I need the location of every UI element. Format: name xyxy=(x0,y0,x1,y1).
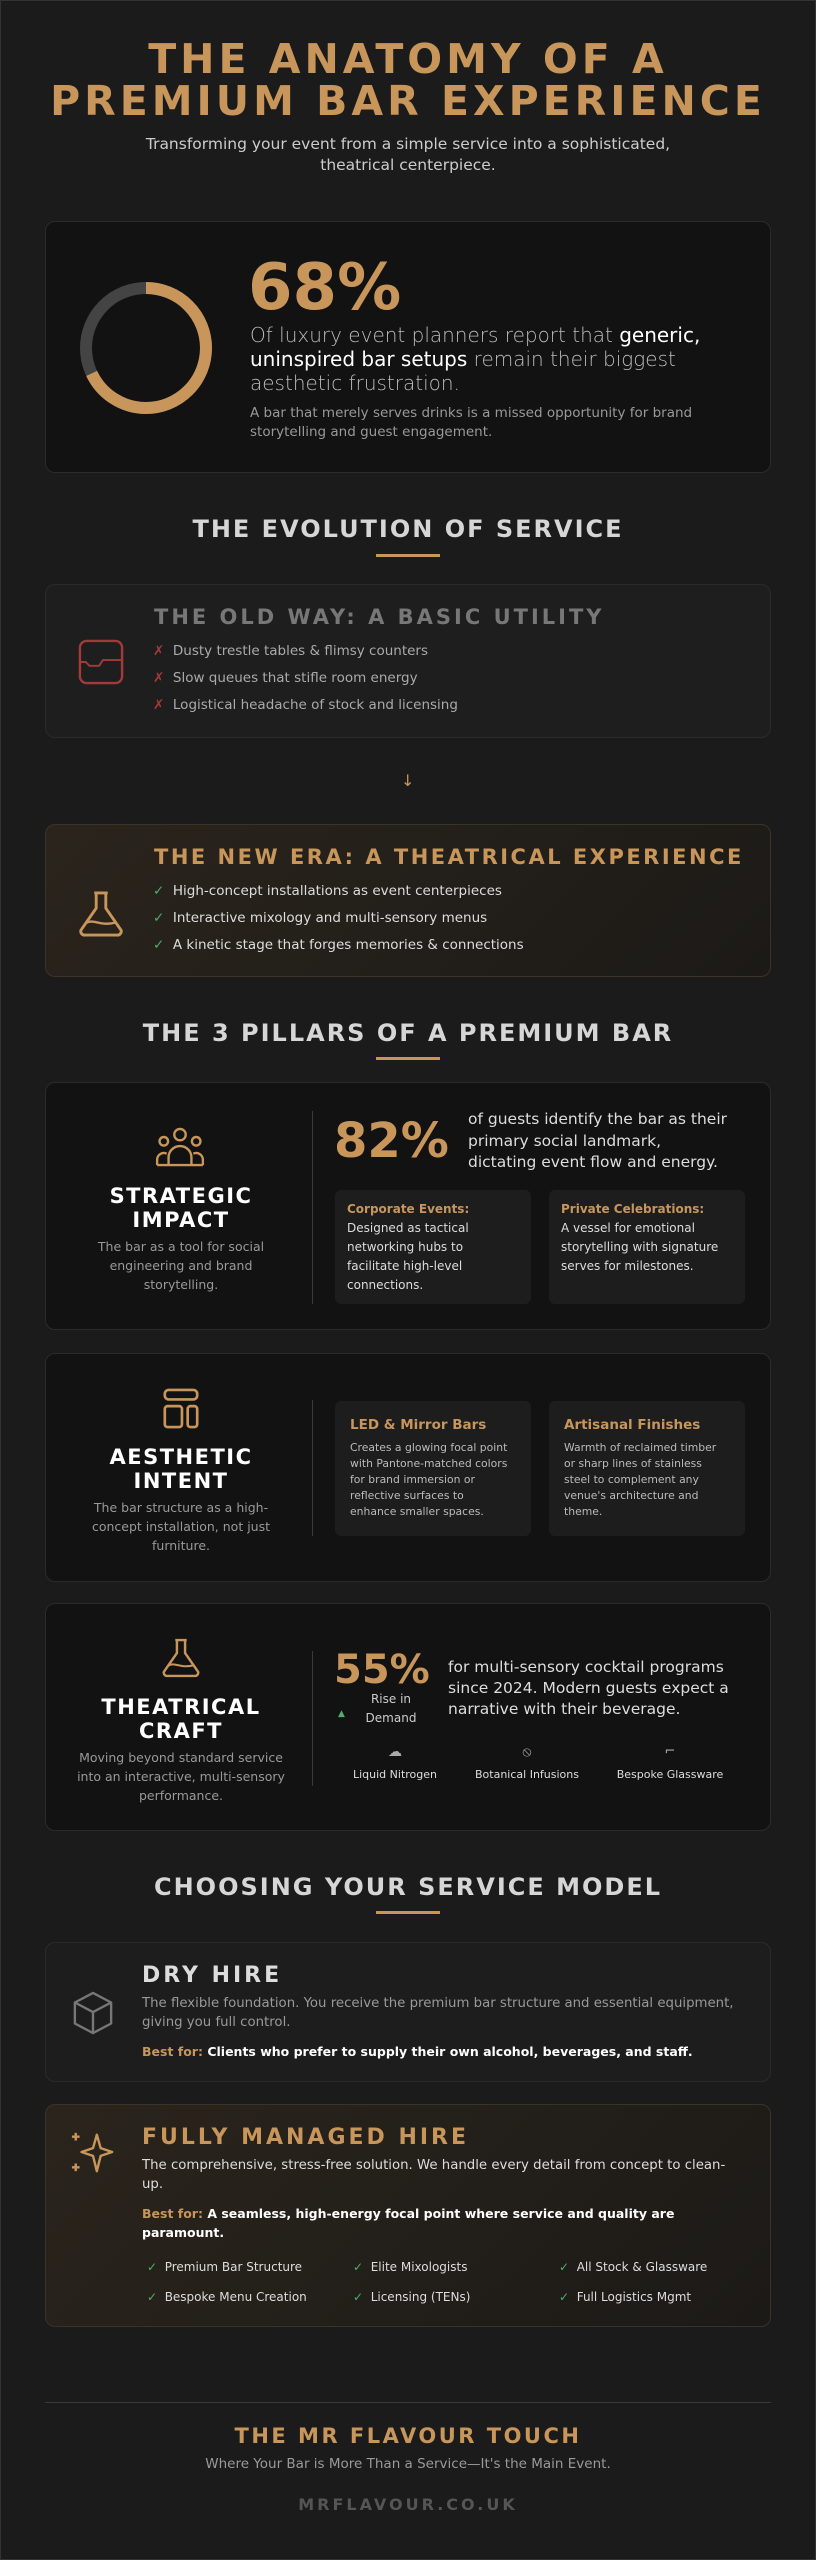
icon: cube xyxy=(74,1992,112,2034)
stat text: Of luxury event planners report that generic, uninspired bar setups remain their biggest aesthetic frustration. xyxy=(250,323,700,395)
sub-card: private: Private Celebrations: xyxy=(561,1202,704,1216)
sub-card: artisanal xyxy=(549,1401,745,1536)
stat 82%: 82% xyxy=(334,1113,449,1169)
icon: flask xyxy=(162,1638,200,1678)
panel: theatrical craft: for multi-sensory cocktail programs since 2024. Modern guests expect a narrative with their beverage. xyxy=(448,1658,729,1718)
panel: aesthetic intent xyxy=(45,1353,771,1582)
icon row: Botanical Infusions xyxy=(475,1768,579,1781)
list: ✗ Dusty trestle tables & flimsy counters xyxy=(153,643,428,659)
sub-card: corporate: connections. xyxy=(347,1278,423,1292)
icon row: ⌐ xyxy=(665,1744,675,1759)
title xyxy=(109,1445,253,1493)
sub-card: corporate xyxy=(335,1190,531,1304)
checklist: ✓ Full Logistics Mgmt xyxy=(559,2290,691,2304)
list: ✗ Slow queues that stifle room energy xyxy=(153,670,418,686)
description: The flexible foundation. You receive the premium bar structure and essential equipment, giving you full control. xyxy=(142,1996,734,2030)
sub-card: LED: with Pantone-matched colors xyxy=(350,1457,507,1470)
list xyxy=(153,643,458,713)
subtitle xyxy=(146,135,670,174)
icon: layout xyxy=(163,1388,199,1428)
checklist: ✓ Premium Bar Structure xyxy=(147,2260,302,2274)
list: ✗ Logistical headache of stock and licensing xyxy=(153,697,458,713)
panel: theatrical craft xyxy=(45,1603,771,1831)
title: THEATRICAL xyxy=(101,1695,261,1719)
title xyxy=(101,1695,261,1743)
donut chart xyxy=(80,282,212,414)
heading: pillars: THE 3 PILLARS OF A PREMIUM BAR xyxy=(143,1019,673,1047)
title: IMPACT xyxy=(132,1208,230,1232)
icon: broken screen xyxy=(78,640,124,684)
panel: theatrical craft: Rise in xyxy=(371,1692,411,1706)
icon row: ☁ xyxy=(388,1744,402,1760)
subtitle: Transforming your event from a simple service into a sophisticated, xyxy=(146,135,670,153)
title xyxy=(110,1184,252,1232)
checklist: ✓ Licensing (TENs) xyxy=(353,2290,470,2304)
panel: strategic impact: of guests identify the bar as their primary social landmark, xyxy=(468,1110,727,1150)
subtitle: theatrical centerpiece. xyxy=(320,156,496,174)
title: PREMIUM BAR EXPERIENCE xyxy=(50,77,766,125)
sub-card: artisanal: Warmth of reclaimed timber xyxy=(564,1441,716,1454)
sub-card: corporate: networking hubs to xyxy=(347,1240,463,1254)
list: ✓ Interactive mixology and multi-sensory menus xyxy=(153,910,487,926)
title: INTENT xyxy=(134,1469,228,1493)
sub-card: private xyxy=(549,1190,745,1304)
sub-card: artisanal: theme. xyxy=(564,1505,602,1518)
icon row: Bespoke Glassware xyxy=(617,1768,723,1781)
checklist: ✓ Bespoke Menu Creation xyxy=(147,2290,307,2304)
description: The bar as a tool for social engineering and brand storytelling. xyxy=(98,1239,264,1292)
note: A bar that merely serves drinks is a missed opportunity for brand storytelling and guest engagement. xyxy=(250,405,692,440)
heading: FULLY MANAGED HIRE xyxy=(142,2125,469,2150)
sub-card: LED: reflective surfaces to xyxy=(350,1489,464,1502)
panel: strategic impact xyxy=(45,1082,771,1330)
heading: DRY HIRE xyxy=(142,1963,282,1988)
icon row xyxy=(353,1744,723,1781)
list: ✓ High-concept installations as event centerpieces xyxy=(153,883,502,899)
arrow: ↓ xyxy=(401,771,414,790)
footer title: THE MR FLAVOUR TOUCH xyxy=(234,2424,581,2448)
title: THE ANATOMY OF A xyxy=(148,35,668,83)
panel: old way xyxy=(45,584,771,738)
sub-card: LED: Creates a glowing focal point xyxy=(350,1441,507,1454)
sub-card: private: A vessel for emotional storytelling with signature serves for milestones. xyxy=(561,1221,718,1273)
sub-card: corporate: Designed as tactical xyxy=(347,1221,469,1235)
icon: flask xyxy=(79,892,123,937)
description: Moving beyond standard service into an interactive, multi-sensory performance. xyxy=(77,1750,285,1803)
heading: THE OLD WAY: A BASIC UTILITY xyxy=(154,605,604,629)
icon: people xyxy=(156,1128,204,1166)
panel: theatrical craft: ▲ xyxy=(338,1709,345,1719)
panel: strategic impact: dictating event flow and energy. xyxy=(468,1153,718,1171)
title xyxy=(50,35,766,125)
best for: Best for: A seamless, high-energy focal point where service and quality are paramount. xyxy=(142,2206,674,2240)
sub-card: corporate: Corporate Events: xyxy=(347,1202,469,1216)
sub-card: artisanal: or sharp lines of stainless xyxy=(564,1457,702,1470)
sub-card: LED: for brand immersion or xyxy=(350,1473,475,1486)
list xyxy=(153,883,524,953)
description: The comprehensive, stress-free solution. We handle every detail from concept to clean-up. xyxy=(142,2158,725,2192)
checklist: ✓ Elite Mixologists xyxy=(353,2260,467,2274)
sub-card: artisanal: venue's architecture and xyxy=(564,1489,698,1502)
heading: evolution: THE EVOLUTION OF SERVICE xyxy=(192,515,624,543)
panel: new era xyxy=(45,824,771,977)
title: AESTHETIC xyxy=(109,1445,253,1469)
checklist: ✓ All Stock & Glassware xyxy=(559,2260,707,2274)
sub-card: LED: LED & Mirror Bars xyxy=(350,1417,486,1433)
panel: fully managed xyxy=(45,2104,771,2327)
panel: dry hire xyxy=(45,1942,771,2082)
big number: 68% xyxy=(248,251,401,325)
sub-card: corporate: facilitate high-level xyxy=(347,1259,462,1273)
title: CRAFT xyxy=(139,1719,223,1743)
footer tagline: Where Your Bar is More Than a Service—It's the Main Event. xyxy=(205,2456,611,2472)
stat 55%: 55% xyxy=(334,1647,430,1693)
sub-card: artisanal: steel to complement any xyxy=(564,1473,699,1486)
title: STRATEGIC xyxy=(110,1184,252,1208)
sub-card: LED: enhance smaller spaces. xyxy=(350,1505,484,1518)
sub-card: LED xyxy=(335,1401,531,1536)
best for: Best for: Clients who prefer to supply their own alcohol, beverages, and staff. xyxy=(142,2044,693,2059)
list: ✓ A kinetic stage that forges memories & connections xyxy=(153,937,524,953)
heading: THE NEW ERA: A THEATRICAL EXPERIENCE xyxy=(154,845,744,869)
icon row: Liquid Nitrogen xyxy=(353,1768,437,1781)
description: The bar structure as a high-concept installation, not just furniture. xyxy=(92,1500,270,1553)
panel: theatrical craft: Demand xyxy=(366,1711,416,1725)
footer url: MRFLAVOUR.CO.UK xyxy=(298,2495,518,2514)
checklist xyxy=(147,2260,707,2304)
heading: service model: CHOOSING YOUR SERVICE MODEL xyxy=(154,1873,662,1901)
sub-card: artisanal: Artisanal Finishes xyxy=(564,1417,700,1433)
icon: sparkle xyxy=(72,2132,114,2172)
icon row: ⦸ xyxy=(522,1744,532,1760)
panel: 68% stat xyxy=(45,221,771,473)
